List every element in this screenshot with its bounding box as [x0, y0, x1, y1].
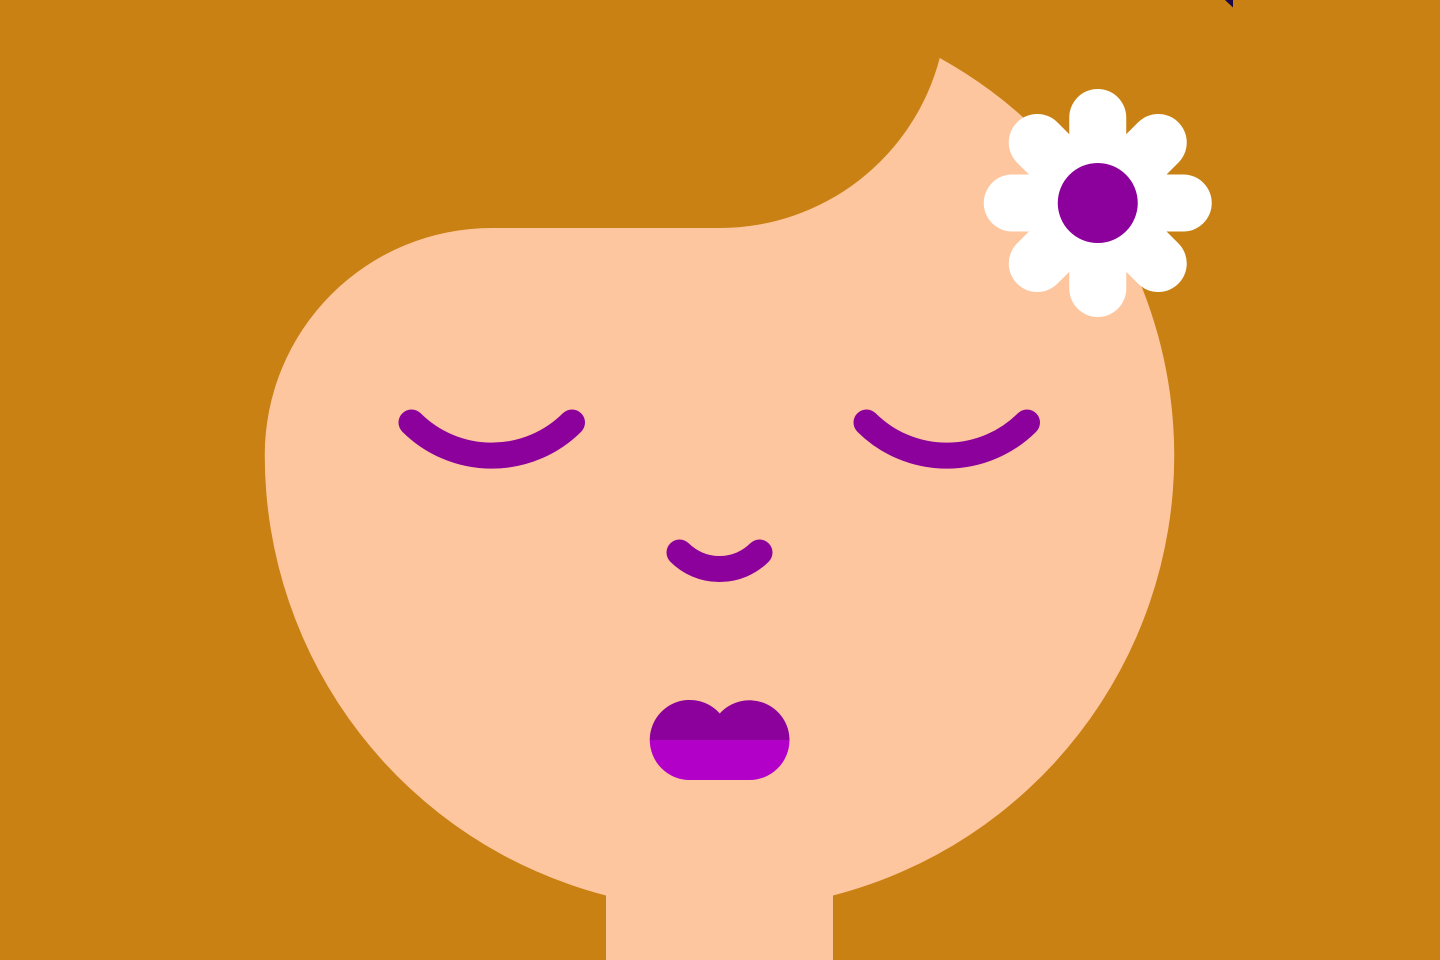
corner fragment — [1225, 0, 1233, 8]
lips — [650, 700, 790, 780]
left closed eye — [412, 422, 572, 456]
nose — [680, 552, 760, 569]
right closed eye — [866, 422, 1027, 456]
upper lip — [650, 700, 790, 740]
flower petals — [1012, 118, 1183, 288]
lower lip — [650, 740, 790, 780]
flower centre — [1058, 163, 1138, 243]
icon: flower — [1012, 118, 1183, 288]
face and neck — [265, 58, 1174, 960]
